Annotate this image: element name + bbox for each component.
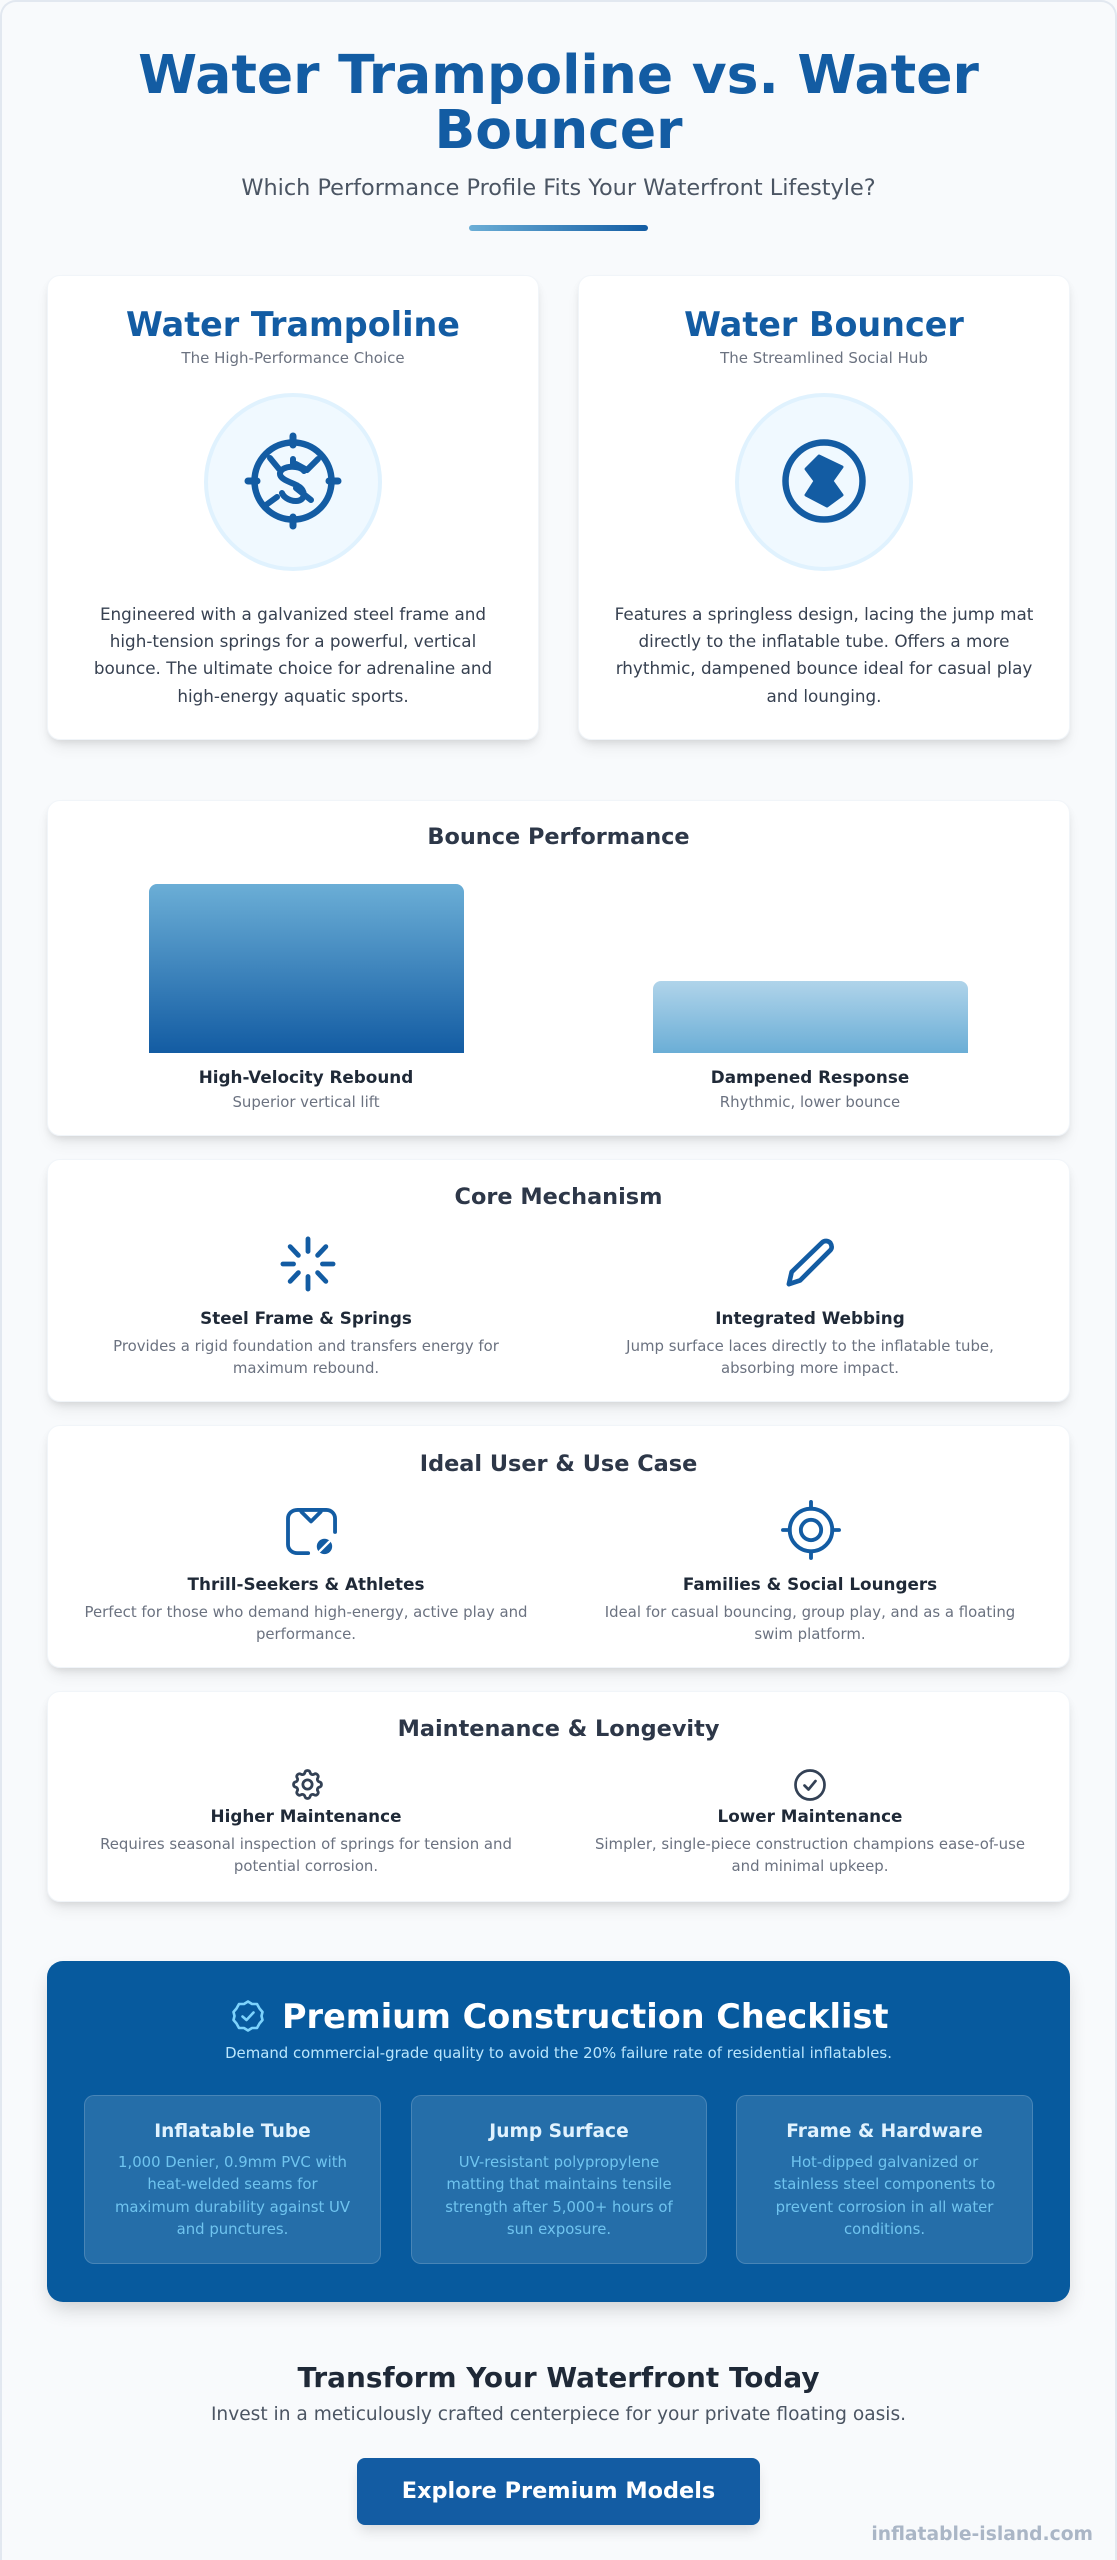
spec title: Jump Surface: [489, 2121, 629, 2142]
panel: water bouncer: [578, 275, 1070, 740]
icon: spinner burst: [280, 1236, 336, 1292]
tagline: The Streamlined Social Hub: [720, 349, 928, 367]
panel: bounce performance: [47, 800, 1070, 1136]
spec text: Hot-dipped galvanized or: [791, 2153, 978, 2171]
button: explore premium models: Explore Premium Models: [402, 2478, 715, 2504]
description: Features a springless design, lacing the jump mat: [615, 604, 1033, 624]
feature description: integrated webbing: Jump surface laces directly to the inflatable tube,: [626, 1337, 994, 1355]
spec text: [445, 2153, 673, 2238]
spec card: jump surface: [411, 2095, 707, 2264]
feature title: steel frame and springs: Steel Frame & Springs: [200, 1308, 412, 1328]
heading: core mechanism: Core Mechanism: [455, 1184, 662, 1210]
feature description: thrill-seekers: [85, 1603, 527, 1643]
spec text: [115, 2153, 350, 2238]
button: explore premium models: [357, 2458, 760, 2525]
icon: target: [781, 1500, 841, 1560]
call to action text: Invest in a meticulously crafted centerpiece for your private floating oasis.: [211, 2404, 906, 2425]
description: rhythmic, dampened bounce ideal for casual play: [616, 658, 1032, 678]
feature title: thrill-seekers: Thrill-Seekers & Athletes: [188, 1574, 424, 1594]
spec text: UV-resistant polypropylene: [459, 2153, 659, 2171]
header accent bar: [469, 225, 648, 231]
title: [138, 43, 979, 161]
feature description: integrated webbing: [625, 1337, 994, 1377]
spec text: stainless steel components to: [774, 2175, 995, 2193]
spec text: maximum durability against UV: [115, 2198, 350, 2216]
description: [615, 604, 1033, 706]
feature description: families: Ideal for casual bouncing, group play, and as a floating: [605, 1603, 1015, 1621]
icon: pencil: [786, 1238, 834, 1286]
feature description: higher maintenance: [100, 1835, 512, 1875]
feature description: thrill-seekers: Perfect for those who demand high-energy, active play and: [85, 1603, 527, 1621]
spec title: Frame & Hardware: [786, 2121, 983, 2142]
icon circle: ring with bow shape: [735, 393, 913, 571]
spec text: sun exposure.: [507, 2220, 611, 2238]
heading: water trampoline: Water Trampoline: [126, 305, 460, 344]
panel: water trampoline: [47, 275, 539, 740]
icon: shield box with prohibited badge: [286, 1508, 337, 1555]
label: dampened response: Dampened Response: [711, 1067, 909, 1087]
feature description: integrated webbing: absorbing more impact.: [721, 1359, 899, 1377]
description: high-tension springs for a powerful, vertical: [110, 631, 476, 651]
feature description: steel frame: [113, 1337, 499, 1377]
feature description: higher maintenance: Requires seasonal inspection of springs for tension and: [100, 1835, 512, 1853]
spec text: prevent corrosion in all water: [776, 2198, 993, 2216]
label: high-velocity rebound: High-Velocity Rebound: [199, 1067, 413, 1087]
title: Water Trampoline vs. Water: [138, 43, 979, 106]
spec card: inflatable tube: [84, 2095, 381, 2264]
spec text: and punctures.: [177, 2220, 288, 2238]
panel: ideal user and use case: [47, 1425, 1070, 1668]
subtitle: Which Performance Profile Fits Your Waterfront Lifestyle?: [241, 175, 876, 201]
spec text: [774, 2153, 995, 2238]
sublabel: rhythmic, lower bounce: Rhythmic, lower bounce: [720, 1093, 900, 1111]
spec text: matting that maintains tensile: [446, 2175, 672, 2193]
heading: premium construction checklist: Premium Construction Checklist: [282, 1997, 888, 2036]
feature description: families: [605, 1603, 1015, 1643]
bar: dampened response: [653, 981, 968, 1053]
heading: maintenance: Maintenance & Longevity: [398, 1716, 719, 1742]
feature description: lower maintenance: and minimal upkeep.: [732, 1857, 888, 1875]
spec card: frame and hardware: [736, 2095, 1033, 2264]
description: and lounging.: [766, 686, 882, 706]
sublabel: superior vertical lift: Superior vertical lift: [232, 1093, 380, 1111]
description: bounce. The ultimate choice for adrenaline and: [94, 658, 492, 678]
feature title: lower maintenance: Lower Maintenance: [718, 1806, 902, 1826]
feature description: families: swim platform.: [754, 1625, 866, 1643]
heading: ideal user: Ideal User & Use Case: [420, 1451, 697, 1477]
spec text: heat-welded seams for: [147, 2175, 318, 2193]
icon circle: target with dollar: [204, 393, 382, 571]
feature description: higher maintenance: potential corrosion.: [234, 1857, 378, 1875]
icon: check circle: [794, 1769, 826, 1801]
feature title: families: Families & Social Loungers: [683, 1574, 937, 1594]
description: high-energy aquatic sports.: [177, 686, 409, 706]
heading: bounce performance: Bounce Performance: [427, 824, 690, 850]
panel: core mechanism: [47, 1159, 1070, 1402]
feature description: steel frame: Provides a rigid foundation and transfers energy for: [113, 1337, 499, 1355]
spec title: Inflatable Tube: [154, 2121, 311, 2142]
tagline: The High-Performance Choice: [181, 349, 405, 367]
title: Bouncer: [434, 98, 683, 161]
feature description: thrill-seekers: performance.: [256, 1625, 356, 1643]
description: [94, 604, 492, 706]
description: Engineered with a galvanized steel frame and: [100, 604, 486, 624]
heading: water bouncer: Water Bouncer: [684, 305, 964, 344]
icon: verified badge: [232, 2000, 264, 2032]
feature description: lower maintenance: Simpler, single-piece construction champions ease-of-use: [595, 1835, 1025, 1853]
watermark: inflatable-island.com: [871, 2524, 1093, 2545]
spec text: 1,000 Denier, 0.9mm PVC with: [118, 2153, 347, 2171]
feature title: higher maintenance: Higher Maintenance: [211, 1806, 401, 1826]
bar: high-velocity rebound: [149, 884, 464, 1053]
icon: gear: [292, 1769, 323, 1800]
panel: maintenance and longevity: [47, 1691, 1070, 1902]
call to action heading: Transform Your Waterfront Today: [297, 2361, 820, 2394]
feature description: lower maintenance: [595, 1835, 1025, 1875]
description: directly to the inflatable tube. Offers a more: [639, 631, 1009, 651]
spec text: strength after 5,000+ hours of: [445, 2198, 673, 2216]
panel: premium construction checklist: [47, 1961, 1070, 2302]
subheading: Demand commercial-grade quality to avoid the 20% failure rate of residential inflatables.: [225, 2044, 892, 2062]
spec text: conditions.: [844, 2220, 925, 2238]
feature description: steel frame: maximum rebound.: [233, 1359, 379, 1377]
feature title: integrated webbing: Integrated Webbing: [715, 1308, 905, 1328]
